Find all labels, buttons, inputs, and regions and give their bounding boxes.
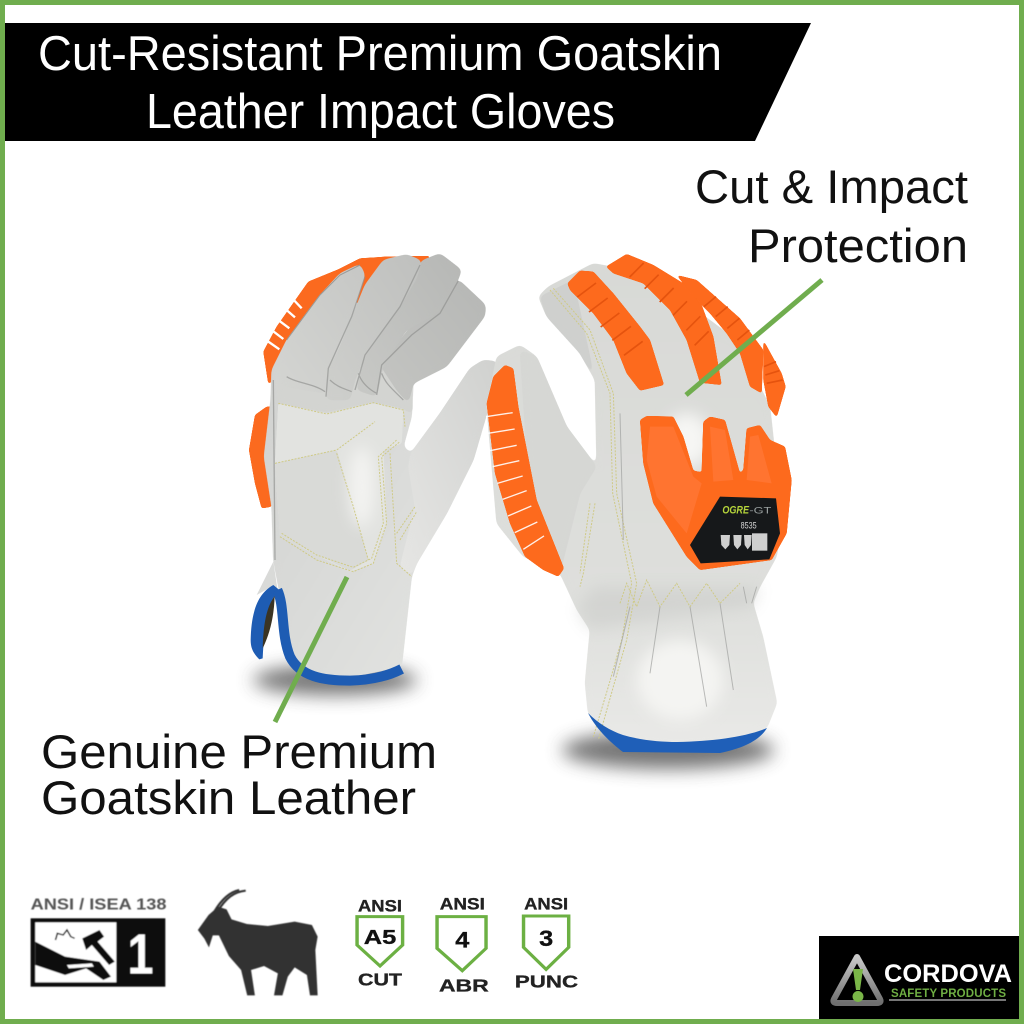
thumb guard ridges [486,413,544,549]
right glove finger-top shading [540,280,595,380]
badge: ansi 3 puncture [515,894,578,991]
knuckle guard [640,416,792,570]
left glove lower palm panel [275,450,368,571]
left glove finger seam [287,265,360,340]
finger guard: little [763,340,786,417]
badge: ansi 3 puncture: ANSI [524,894,568,913]
finger guard ridges [577,263,783,383]
left glove palm patch [275,403,403,572]
right glove wrist shade [577,587,760,630]
left glove palm highlight [349,447,374,527]
product label: OGRE [722,504,749,516]
knuckle guard facets [647,427,772,533]
pointer line: cut and impact [686,280,822,395]
thumb guard [487,365,564,577]
left glove strap inner [263,596,275,648]
right glove blue hem [588,713,767,753]
title banner [5,23,811,141]
finger guard: index [567,271,664,391]
callout: genuine goatskin [41,725,437,824]
left glove cuff flap [257,562,277,595]
left glove body [264,295,497,677]
shadow: left glove [253,665,417,695]
callout: genuine goatskin: Goatskin Leather [41,771,416,824]
badge: ansi a5 cut [357,896,403,989]
left glove blue strap [277,590,402,681]
right glove cuff highlight [637,640,723,720]
icon: ansi isea 138 impact level 1: 1 [127,922,153,985]
right glove seams [550,288,740,740]
left glove knuckle wrinkles [275,365,413,415]
callout: cut and impact protection: Cut & Impact [695,160,968,213]
pointer line: goatskin [275,577,347,722]
badge: ansi 4 abrasion: ABR [439,976,489,995]
logo warning triangle [833,957,881,1003]
left glove back guards [249,256,430,508]
finger guard: ring [677,275,763,393]
badge: ansi a5 cut: A5 [364,925,396,949]
left glove (palm view) [249,253,497,681]
left glove creases [273,265,458,560]
cordova logo [819,936,1019,1019]
left glove thumb [400,360,497,575]
right glove leather body [487,263,788,745]
product label [690,497,780,563]
icon: ansi isea 138 impact level 1: ANSI / ISEA 138 [31,896,166,913]
left glove finger 3 [357,253,462,397]
badge: ansi 3 puncture: PUNC [515,972,578,991]
badge: ansi a5 cut: ANSI [358,896,402,915]
title banner: Leather Impact Gloves [146,85,615,139]
left glove ridges [266,296,302,349]
product label: -GT [749,505,772,515]
badge: ansi 4 abrasion: 4 [455,929,470,953]
icon: ansi isea 138 impact level 1 [31,896,166,987]
finger guard: middle [606,254,722,385]
callout: cut and impact protection: Protection [748,219,968,272]
badge: ansi 4 abrasion: ANSI [440,894,485,913]
badge: ansi 3 puncture: 3 [539,927,553,952]
left glove finger 2 [327,254,422,400]
callout: cut and impact protection [695,160,968,272]
right glove back highlight [663,413,710,467]
left glove blue flap [251,585,279,659]
left glove finger 4 [380,279,486,403]
right glove thumb shading [520,350,597,573]
product label: 8535 [741,521,757,531]
cordova logo: SAFETY PRODUCTS [891,988,1006,1000]
right glove (back view) [486,254,792,753]
shadow: right glove [562,731,774,769]
left glove stitching [275,403,417,577]
right glove gather folds [613,413,757,707]
cordova logo: CORDOVA [884,960,1012,988]
badge: ansi 4 abrasion [437,894,489,995]
certification icons row [31,890,578,995]
logo exclamation mark [853,969,864,1002]
left glove finger 1 [273,264,365,393]
callout: genuine goatskin: Genuine Premium [41,725,437,778]
badge: ansi a5 cut: CUT [358,970,403,989]
title banner: Cut-Resistant Premium Goatskin [38,27,722,81]
icon: goat silhouette [198,890,318,995]
